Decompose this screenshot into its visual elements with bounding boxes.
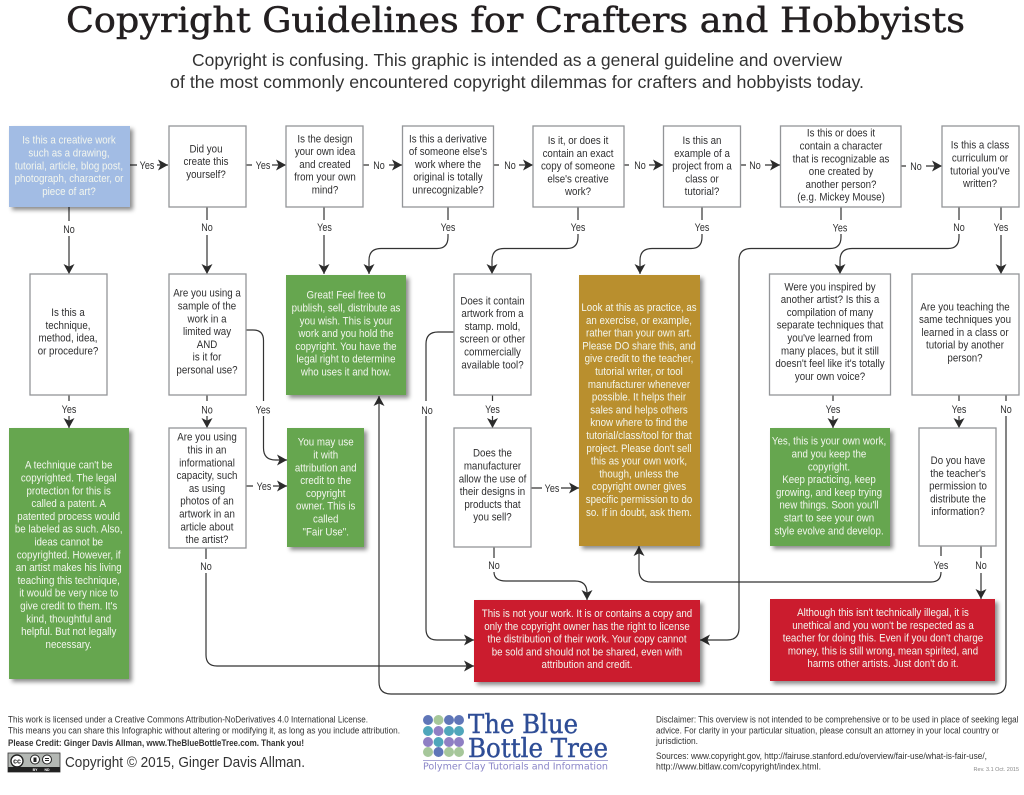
panel: technique result: teaching this technique, — [18, 575, 120, 587]
panel: technique result: be labeled as such. Also, — [15, 524, 123, 536]
connectors: flowchart arrows and yes/no labels: No — [504, 160, 516, 172]
panel: class project: example of a — [674, 148, 730, 160]
panel: start question: Is this a creative work — [22, 135, 116, 147]
panel: class curriculum: tutorial you've — [950, 166, 1010, 178]
connectors: flowchart arrows and yes/no labels: No — [201, 405, 213, 417]
panel: class project: tutorial? — [685, 187, 719, 198]
connectors: flowchart arrows and yes/no labels: Yes — [257, 481, 271, 493]
connectors: flowchart arrows and yes/no labels: No — [910, 161, 922, 173]
connectors: flowchart arrows and yes/no labels: Yes — [485, 404, 500, 416]
panel: informational capacity: Are you using — [177, 432, 237, 444]
panel: inspired — [770, 274, 890, 395]
panel: stamp artwork: artwork from a — [461, 309, 524, 320]
panel: technique question: Is this a — [51, 307, 85, 319]
panel: practice result: so. If in doubt, ask them. — [586, 507, 692, 519]
license text: This means you can share this Infographic without altering or modifying it, as long as you include attribution. — [8, 725, 400, 735]
disclaimer text: advice. For clarity in your particular situation, please consult an attorney in your local country or — [656, 725, 999, 735]
panel: fair use result: credit to the — [300, 476, 351, 487]
logo: The Blue Bottle Tree: Bottle Tree — [468, 734, 608, 764]
panel: class project: Is this an — [683, 135, 722, 147]
connectors: flowchart arrows and yes/no labels: Yes — [994, 222, 1008, 234]
panel: own idea: from your own — [294, 172, 356, 184]
panel: fair use result: You may use — [298, 437, 354, 449]
connectors: flowchart arrows and yes/no labels: Yes — [441, 222, 455, 234]
panel: own work result: copyright. — [808, 462, 850, 474]
panel: technique result: patented process would — [17, 511, 120, 523]
connectors: flowchart arrows and yes/no labels: Yes — [62, 404, 76, 416]
connectors: flowchart arrows and yes/no labels: No — [201, 222, 213, 234]
panel: not your work result: be sold and should not be shared, even with — [492, 647, 682, 659]
panel: character: contain a character — [800, 141, 883, 153]
connectors: flowchart arrows and yes/no labels: No — [634, 160, 646, 172]
connectors: flowchart arrows and yes/no labels: Yes — [140, 160, 154, 172]
panel: technique result — [9, 428, 129, 679]
connectors: flowchart arrows and yes/no labels: Yes — [833, 223, 847, 235]
panel: derivative: of someone else's — [409, 147, 487, 158]
panel: practice result: Look at this as practice, as — [581, 302, 697, 314]
panel: exact copy: copy of someone — [541, 161, 615, 173]
panel: limited sample: Are you using a — [173, 288, 241, 300]
panel: stamp artwork: available tool? — [461, 360, 524, 372]
panel: did you create: create this — [184, 157, 228, 168]
panel: informational capacity: article about — [180, 522, 234, 534]
panel: character — [780, 126, 901, 207]
subtitle: Copyright is confusing. This graphic is intended as a general guideline and overview — [192, 50, 842, 70]
panel: technique result: A technique can't be — [25, 460, 113, 472]
panel: great result — [286, 275, 406, 395]
panel: teacher permission: distribute the — [930, 494, 986, 506]
revision note: Rev. 3.1 Oct. 2015 — [974, 767, 1019, 773]
panel: inspired: another artist? Is this a — [781, 295, 879, 306]
disclaimer text: jurisdiction. — [655, 736, 698, 746]
panel: exact copy — [533, 126, 624, 207]
panel: own idea: your own idea — [295, 147, 355, 158]
panel: teaching — [912, 274, 1019, 395]
panel: technique result: give credit to them. It's — [20, 601, 117, 613]
panel: did you create: Did you — [189, 144, 223, 156]
connectors: flowchart arrows and yes/no labels: No — [63, 224, 75, 236]
connectors: flowchart arrows and yes/no labels: Yes — [256, 160, 270, 172]
connectors: flowchart arrows and yes/no labels: Yes — [571, 222, 585, 234]
panel: technique result: protection for this is — [27, 486, 111, 498]
panel: exact copy: contain an exact — [543, 148, 614, 160]
panel: start question: piece of art? — [42, 186, 96, 198]
connectors: flowchart arrows and yes/no labels: Yes — [934, 560, 948, 572]
panel: character: (e.g. Mickey Mouse) — [797, 192, 885, 204]
panel: unethical result: money, this is still wrong, mean spirited, and — [788, 646, 978, 658]
panel: derivative: original is totally — [413, 172, 483, 184]
panel: derivative: work where the — [414, 159, 481, 171]
panel: practice result — [579, 275, 700, 546]
panel: great result: you wish. This is your — [300, 316, 393, 328]
panel: limited sample: sample of the — [178, 301, 236, 313]
panel: exact copy: Is it, or does it — [548, 135, 608, 147]
panel: character: that is recognizable as — [793, 154, 889, 166]
icon: creative commons badge: ND — [44, 768, 50, 772]
panel: practice result: this as your own work, — [591, 456, 687, 468]
connectors: flowchart arrows and yes/no labels: Yes — [545, 483, 559, 495]
connectors: flowchart arrows and yes/no labels: No — [488, 560, 500, 572]
disclaimer text: http://www.bitlaw.com/copyright/index.html. — [656, 761, 821, 771]
panel: great result: copyright. You have the — [295, 341, 397, 353]
panel: informational capacity: this in an — [188, 445, 227, 457]
panel: exact copy: work? — [564, 187, 591, 198]
panel: derivative: Is this a derivative — [409, 134, 487, 146]
panel: practice result: tutorial/class/tool for that — [586, 430, 692, 442]
panel: teacher permission: Do you have — [931, 455, 985, 467]
panel: own work result: new things. Soon you'll — [779, 500, 879, 512]
panel: informational capacity: informational — [179, 458, 235, 470]
panel: inspired: your own voice? — [795, 371, 865, 383]
license text — [8, 715, 400, 748]
panel: practice result: sales and helps others — [590, 405, 688, 417]
panel: practice result: tutorial writer, or tool — [595, 366, 683, 378]
panel: technique result: ideas cannot be — [34, 537, 103, 549]
panel: not your work result: attribution and credit. — [542, 660, 632, 671]
copyright line: Copyright © 2015, Ginger Davis Allman. — [65, 755, 305, 771]
panel: stamp artwork: stamp. mold, — [465, 321, 520, 333]
panel: fair use result: called — [313, 514, 339, 526]
panel: practice result: specific permission to do — [586, 494, 692, 506]
connectors: flowchart arrows and yes/no labels: No — [975, 560, 987, 572]
panel: own idea: Is the design — [297, 134, 353, 146]
panel: informational capacity: capacity, such — [177, 471, 238, 482]
panel: class curriculum: Is this a class — [951, 140, 1009, 152]
panel: fair use result: attribution and — [295, 463, 357, 475]
panel: limited sample: personal use? — [176, 365, 238, 377]
panel: stamp artwork: commercially — [464, 347, 522, 359]
panel: derivative — [402, 126, 494, 207]
panel: great result: legal right to determine — [296, 354, 396, 366]
panel: limited sample: AND — [197, 339, 218, 351]
panel: fair use result: "Fair Use". — [303, 527, 349, 539]
panel: great result: publish, sell, distribute as — [292, 303, 400, 315]
logo: The Blue Bottle Tree: The Blue — [468, 710, 578, 740]
panel: own work result: start to see your own — [784, 513, 874, 525]
panel: derivative: unrecognizable? — [412, 185, 484, 197]
panel: teaching: learned in a class or — [921, 327, 1009, 339]
panel: practice result: an exercise, or example, — [586, 315, 692, 327]
panel: great result: Great! Feel free to — [307, 290, 386, 302]
panel: practice result: Please DO share this, and — [582, 341, 696, 353]
panel: character: another person? — [806, 179, 877, 191]
panel: not your work result: the distribution of their work. Your copy cannot — [487, 634, 687, 646]
panel: informational capacity: artwork in an — [179, 509, 235, 521]
panel: fair use result: it with — [313, 450, 338, 462]
connectors: flowchart arrows and yes/no labels: Yes — [952, 404, 966, 416]
panel: own work result — [770, 428, 890, 546]
panel: technique question: or procedure? — [38, 346, 98, 358]
icon: creative commons badge — [8, 753, 60, 772]
panel: unethical result: Although this isn't technically illegal, it is — [797, 607, 969, 619]
panel: technique result: it would be very nice to — [19, 588, 118, 600]
connectors: flowchart arrows and yes/no labels: No — [421, 405, 433, 417]
disclaimer text: Sources: www.copyright.gov, http://fairuse.stanford.edu/overview/fair-use/what-is-fair-use/, — [656, 751, 987, 761]
connectors: flowchart arrows and yes/no labels: No — [953, 222, 965, 234]
connectors: flowchart arrows and yes/no labels: Yes — [695, 222, 709, 234]
panel: unethical result: unethical and you won't be respected as a — [792, 620, 974, 632]
panel: limited sample: limited way — [183, 327, 232, 338]
panel: inspired: separate techniques that — [777, 320, 883, 332]
panel: technique result: called a patent. A — [31, 499, 106, 510]
panel: class curriculum — [942, 126, 1019, 207]
panel: teaching: Are you teaching the — [920, 302, 1010, 314]
panel: technique question: technique, — [46, 320, 90, 332]
icon: dot grid — [423, 715, 464, 757]
panel: inspired: many places, but it still — [781, 346, 879, 358]
panel: not your work result: only the copyright owner has the right to license — [484, 621, 690, 633]
panel: start question: tutorial, article, blog post, — [15, 161, 123, 173]
panel: practice result: rather than your own art. — [586, 328, 692, 340]
panel: fair use result — [287, 428, 364, 547]
panel: technique result: helpful. But not legally — [21, 627, 117, 638]
panel: class curriculum: written? — [962, 179, 997, 190]
panel: unethical result: harms other artists. Just don't do it. — [807, 659, 959, 670]
panel: manufacturer: you sell? — [473, 512, 512, 524]
panel: inspired: you've learned from — [787, 333, 873, 345]
connectors: flowchart arrows and yes/no labels: Yes — [317, 222, 332, 234]
panel: manufacturer: allow the use of — [459, 474, 526, 486]
panel: limited sample: is it for — [193, 352, 222, 364]
logo: The Blue Bottle Tree: Polymer Clay Tutorials and Information — [423, 762, 608, 772]
panel: class curriculum: curriculum or — [952, 153, 1009, 165]
panel: own work result: Yes, this is your own work, — [772, 436, 886, 448]
panel: own work result: growing, and keep trying — [776, 487, 882, 499]
panel: class project: class or — [685, 174, 719, 186]
panel: technique question: method, idea, — [39, 333, 97, 345]
panel: own idea: mind? — [312, 185, 338, 197]
panel: own work result: and you keep the — [792, 449, 866, 461]
panel: practice result: project. Please don't sell — [586, 443, 692, 455]
panel: not your work result — [474, 600, 700, 682]
panel: class project — [664, 126, 740, 207]
panel: start question — [9, 126, 130, 207]
connectors: flowchart arrows and yes/no labels: No — [373, 160, 385, 172]
connectors: flowchart arrows and yes/no labels: Yes — [256, 405, 270, 417]
panel: practice result: though, unless the — [599, 469, 679, 481]
panel: teaching: person? — [947, 353, 983, 365]
panel: manufacturer: Does the — [473, 448, 512, 460]
disclaimer text — [655, 715, 1018, 771]
panel: practice result: know where to find the — [590, 418, 688, 429]
panel: not your work result: This is not your work. It is or contains a copy and — [482, 608, 692, 620]
panel: technique result: necessary. — [46, 639, 92, 651]
panel: did you create: yourself? — [186, 169, 226, 181]
icon: creative commons badge: cc — [13, 758, 21, 766]
license text: Please Credit: Ginger Davis Allman, www.TheBlueBottleTree.com. Thank you! — [8, 738, 304, 748]
panel: character: Is this or does it — [807, 128, 875, 140]
panel: technique result: an artist makes his living — [16, 563, 122, 574]
panel: technique question — [30, 274, 107, 395]
subtitle: of the most commonly encountered copyright dilemmas for crafters and hobbyists today. — [170, 72, 864, 92]
connectors: flowchart arrows and yes/no labels: No — [200, 561, 212, 573]
panel: stamp artwork — [454, 274, 531, 395]
panel: fair use result: owner. This is — [296, 501, 355, 513]
panel: technique result: copyrighted. The legal — [21, 473, 116, 485]
panel: manufacturer — [454, 428, 531, 547]
panel: practice result: copyright owner gives — [592, 482, 686, 493]
panel: fair use result: copyright — [306, 488, 346, 500]
panel: manufacturer: their designs in — [460, 487, 525, 498]
panel: unethical result: teacher for doing this. Even if you don't charge — [783, 633, 983, 645]
panel: limited sample: work in a — [187, 314, 227, 326]
panel: great result: work and you hold the — [297, 329, 394, 340]
panel: limited sample — [169, 274, 246, 395]
panel: inspired: Were you inspired by — [784, 282, 876, 294]
panel: teacher permission: the teacher's — [930, 468, 986, 480]
panel: inspired: doesn't feel like it's totally — [775, 359, 885, 370]
panel: inspired: compilation of many — [787, 307, 874, 319]
subtitle — [170, 50, 864, 92]
panel: informational capacity: the artist? — [186, 535, 229, 546]
title: Copyright Guidelines for Crafters and Hobbyists — [66, 1, 965, 41]
panel: class project: project from a — [672, 161, 732, 173]
panel: start question: photograph, character, or — [15, 174, 124, 185]
panel: technique result: copyrighted. However, if — [17, 550, 121, 562]
panel: start question: such as a drawing, — [28, 148, 110, 160]
panel: unethical result — [770, 599, 995, 681]
panel: did you create — [169, 126, 246, 207]
connectors: flowchart arrows and yes/no labels: No — [1000, 404, 1012, 416]
panel: informational capacity: photos of an — [180, 496, 234, 508]
panel: stamp artwork: Does it contain — [460, 296, 525, 308]
panel: own work result: Keep practicing, keep — [782, 475, 876, 486]
panel: manufacturer: manufacturer — [464, 461, 522, 473]
panel: own idea — [286, 126, 363, 207]
logo: The Blue Bottle Tree — [423, 710, 608, 772]
panel: informational capacity — [169, 428, 246, 548]
panel: manufacturer: products that — [464, 499, 521, 511]
panel: character: one created by — [809, 167, 874, 178]
license text: This work is licensed under a Creative Commons Attribution-NoDerivatives 4.0 International License. — [8, 715, 368, 725]
panel: teacher permission: permission to — [929, 481, 987, 493]
panel: great result: who uses it and how. — [300, 367, 391, 379]
panel: teacher permission — [919, 428, 996, 546]
panel: own work result: style evolve and develop. — [774, 526, 884, 538]
panel: own idea: and created — [299, 159, 351, 171]
panel: teaching: tutorial by another — [926, 340, 1004, 352]
icon: creative commons badge: BY — [33, 768, 38, 772]
panel: teacher permission: information? — [931, 507, 985, 518]
panel: teaching: same techniques you — [919, 315, 1011, 326]
panel: stamp artwork: screen or other — [460, 334, 526, 346]
panel: informational capacity: as using — [189, 483, 225, 495]
connectors: flowchart arrows and yes/no labels: Yes — [826, 404, 840, 416]
panel: practice result: give credit to the teacher, — [585, 354, 693, 365]
panel: practice result: manufacturer whenever — [588, 379, 691, 391]
connectors: flowchart arrows and yes/no labels: No — [749, 160, 761, 172]
panel: exact copy: else's creative — [547, 174, 609, 186]
connectors: flowchart arrows and yes/no labels — [62, 160, 1012, 694]
panel: practice result: possible. It helps their — [592, 392, 687, 404]
panel: technique result: kind, thoughtful and — [26, 614, 111, 626]
